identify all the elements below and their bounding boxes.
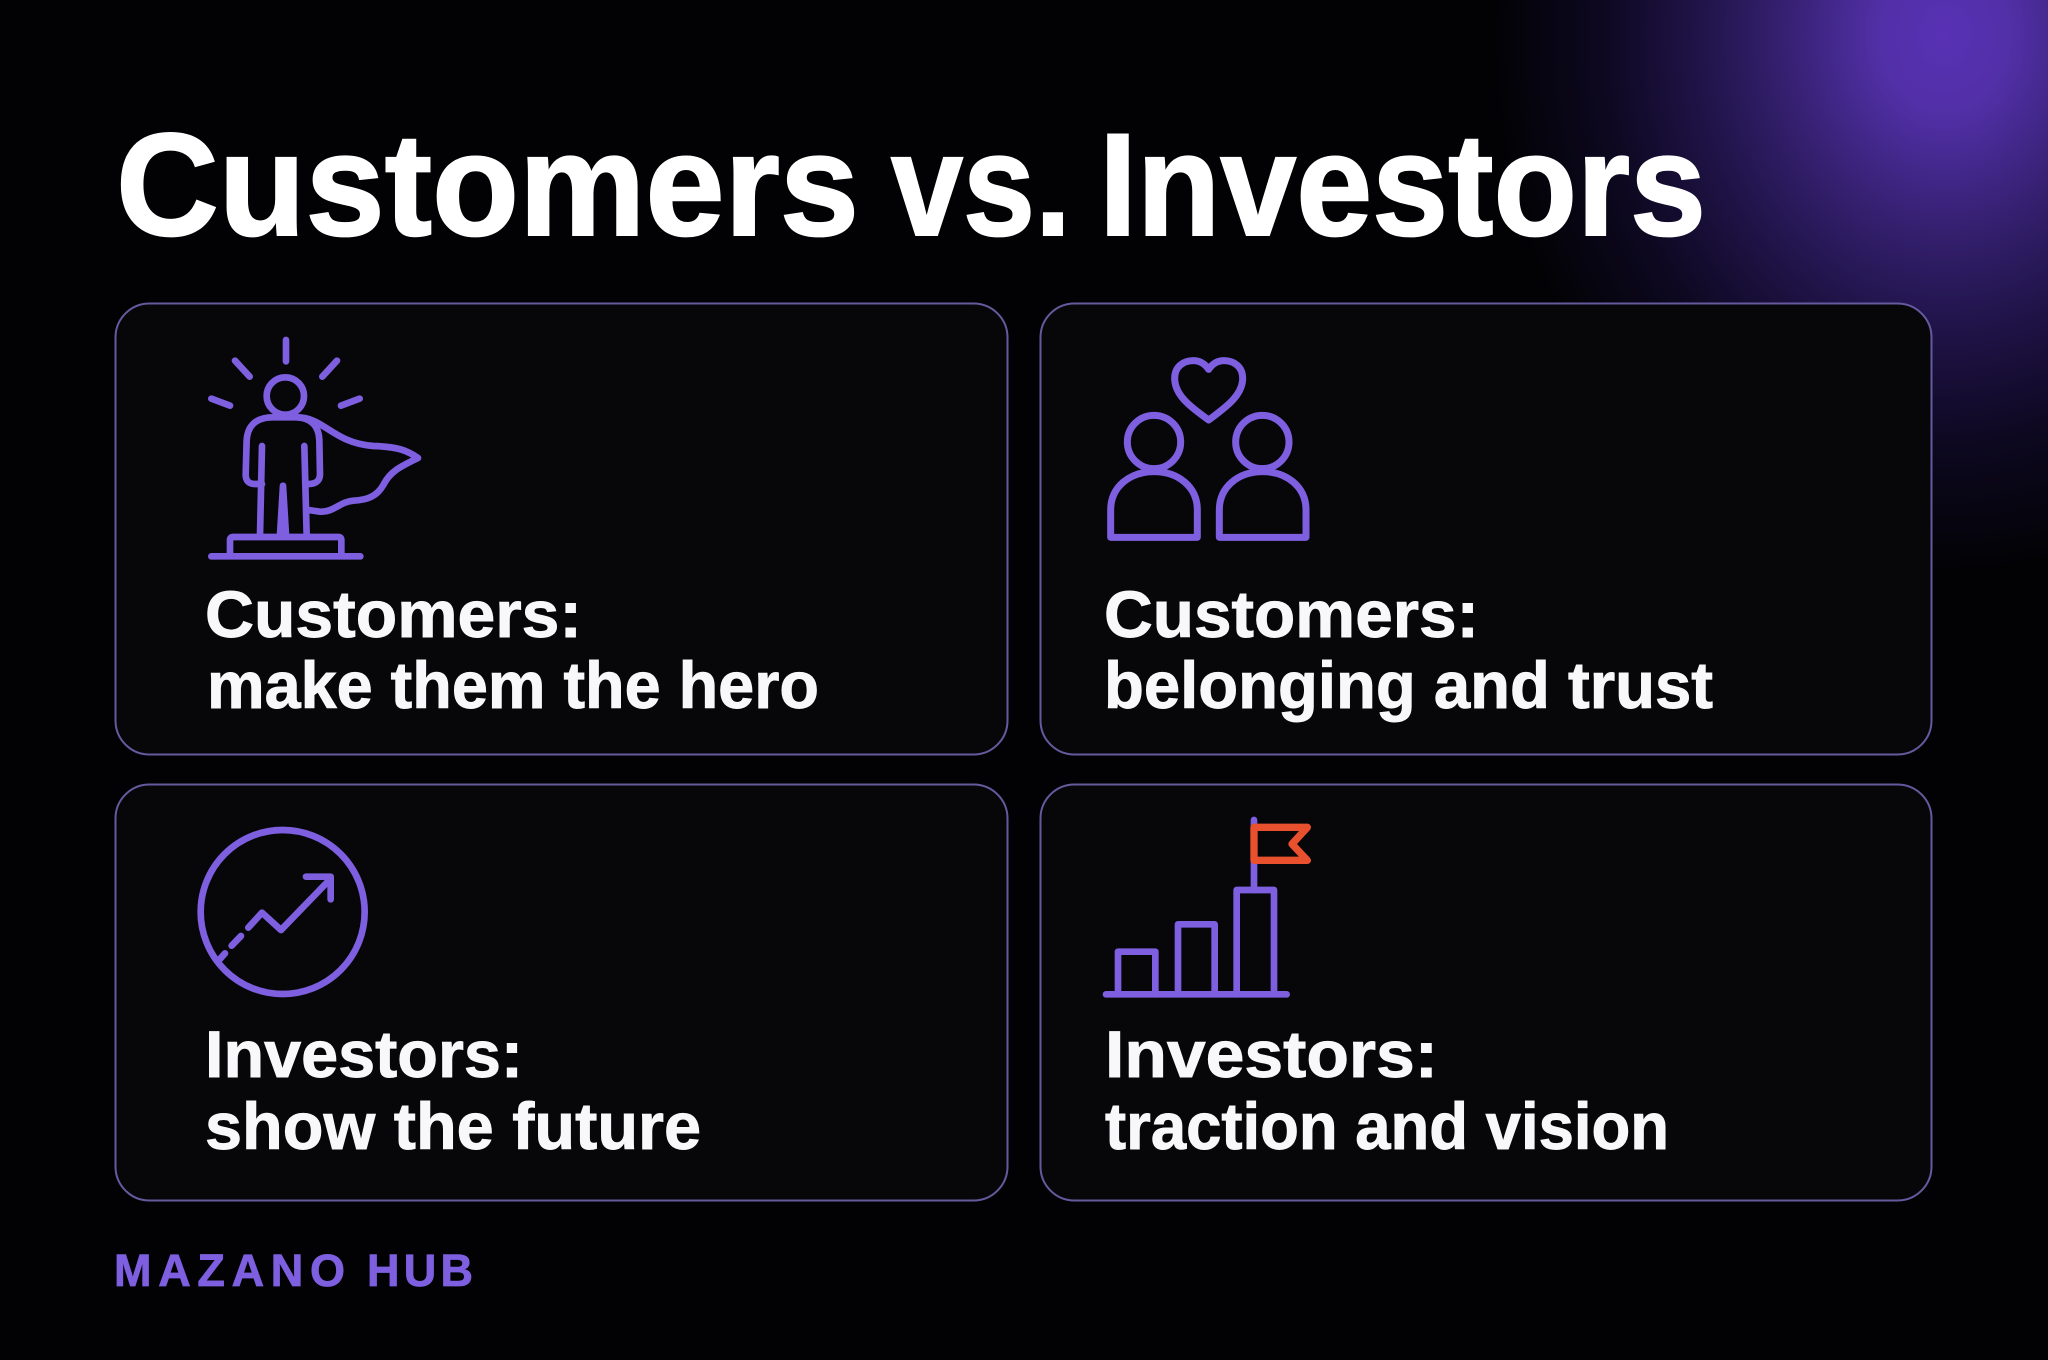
icon: bar chart with flag — [1106, 820, 1307, 994]
heading: investors: Investors: — [205, 1017, 523, 1091]
heading: customers: Customers: — [1104, 577, 1479, 651]
icon: two people and a heart — [1111, 361, 1306, 537]
heading: customers: Customers: — [205, 577, 582, 651]
text: make them the hero: make them the hero — [207, 648, 819, 722]
text: belonging and trust: belonging and trust — [1104, 648, 1713, 722]
panel: investors future — [116, 784, 1008, 1200]
text: traction and vision: traction and vision — [1105, 1089, 1669, 1163]
footer brand: HUB — [367, 1245, 473, 1296]
panel: investors traction — [1040, 784, 1932, 1200]
footer brand: MAZANO — [114, 1245, 345, 1296]
panel: customers hero — [116, 304, 1008, 754]
panel: customers belonging — [1040, 304, 1932, 754]
title — [116, 103, 1706, 266]
heading: investors: Investors: — [1105, 1017, 1438, 1091]
icon: growth arrow in circle — [201, 830, 365, 994]
title: Customers — [116, 103, 859, 266]
text: show the future: show the future — [205, 1089, 701, 1163]
title: Investors — [1099, 103, 1706, 266]
title: vs. — [891, 103, 1071, 266]
icon: caped hero on a pedestal — [211, 340, 418, 556]
footer brand — [114, 1245, 473, 1296]
